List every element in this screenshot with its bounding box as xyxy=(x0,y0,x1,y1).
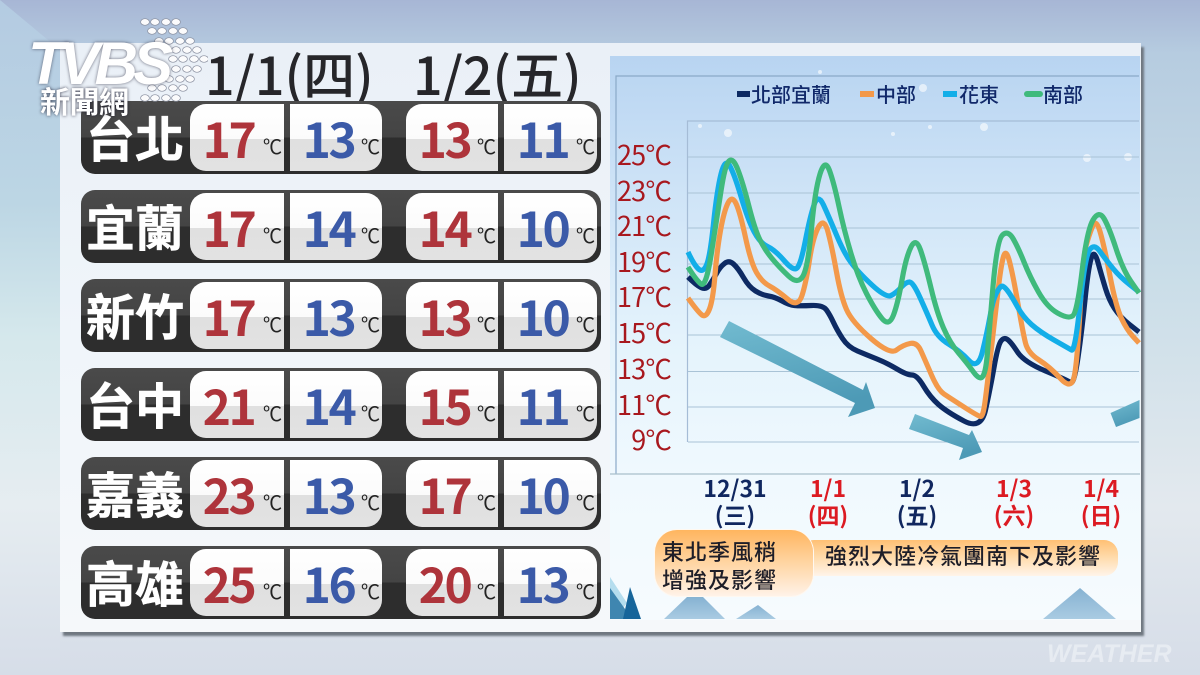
row: Hsinchu: °C xyxy=(263,309,281,338)
y-axis labels: 21°C xyxy=(617,205,671,244)
row: Chiayi: °C xyxy=(361,487,379,516)
row: Kaohsiung: 16 xyxy=(303,547,354,617)
row: Yilan: °C xyxy=(361,220,379,249)
arrow: second cooling trend xyxy=(909,414,982,460)
row: Taichung: °C xyxy=(477,398,495,427)
callout: cold air mass: 強烈大陸冷氣團南下及影響 xyxy=(825,539,1101,571)
row: Taipei xyxy=(81,101,601,174)
y-axis labels: 13°C xyxy=(617,348,671,387)
row: Kaohsiung: °C xyxy=(576,576,594,605)
x-axis date: 1/4 xyxy=(1081,470,1121,531)
row: Kaohsiung: °C xyxy=(361,576,379,605)
y-axis labels: 25°C xyxy=(617,134,671,173)
row: Yilan: °C xyxy=(263,220,281,249)
y-axis labels: 19°C xyxy=(617,241,671,280)
row: Hsinchu: °C xyxy=(477,309,495,338)
callout: northeast monsoon: 東北季風稍 xyxy=(662,535,777,567)
x-axis date: 12/31: 12/31 xyxy=(703,470,767,504)
row: Kaohsiung: 13 xyxy=(517,547,568,617)
row: Kaohsiung: 25 xyxy=(203,547,254,617)
row: Hsinchu: 17 xyxy=(203,280,254,350)
y-axis labels: 9°C xyxy=(631,419,671,458)
row: Taipei: °C xyxy=(361,131,379,160)
legend: south swatch xyxy=(1024,91,1043,97)
row: Kaohsiung: 20 xyxy=(419,547,470,617)
legend: north Yilan label: 北部宜蘭 xyxy=(751,79,831,108)
row: Chiayi xyxy=(81,457,601,530)
x-axis date: 1/2: 1/2 xyxy=(899,470,935,504)
row: Yilan: 17 xyxy=(203,191,254,261)
logo: TVBS news network xyxy=(28,18,208,122)
line: Hualien-Taitung xyxy=(688,163,1139,364)
x-axis date: 1/1: (四) xyxy=(808,497,848,531)
background: left sky strip xyxy=(0,0,42,36)
heading: date 1/2: 1/2(五) xyxy=(413,35,582,110)
row: Chiayi: 嘉義 xyxy=(86,457,184,528)
arrow: third warming trend xyxy=(1110,400,1140,427)
arrow: first cooling trend xyxy=(720,321,875,417)
legend: south label: 南部 xyxy=(1043,79,1083,108)
row: Taipei: 13 xyxy=(303,102,354,172)
row: Hsinchu: 10 xyxy=(517,280,568,350)
row: Taichung: °C xyxy=(576,398,594,427)
x-axis date: 1/4: 1/4 xyxy=(1083,470,1119,504)
row: Hsinchu: 13 xyxy=(303,280,354,350)
line: north Yilan xyxy=(688,254,1139,424)
x-axis date: 12/31 xyxy=(703,470,767,531)
row: Taichung: 11 xyxy=(517,369,568,439)
x-axis date: 1/1 xyxy=(808,470,848,531)
y-axis labels: 17°C xyxy=(617,276,671,315)
row: Kaohsiung: °C xyxy=(477,576,495,605)
row: Taipei: °C xyxy=(263,131,281,160)
y-axis labels: 11°C xyxy=(617,384,671,423)
row: Kaohsiung: °C xyxy=(263,576,281,605)
legend: Hualien swatch xyxy=(943,91,957,97)
icon: logo dots xyxy=(140,18,208,102)
row: Hsinchu: 13 xyxy=(419,280,470,350)
callout: northeast monsoon xyxy=(655,530,813,596)
row: Taichung: 台中 xyxy=(86,368,184,439)
legend: central swatch xyxy=(860,91,874,97)
row: Yilan: °C xyxy=(576,220,594,249)
row: Yilan: 14 xyxy=(303,191,354,261)
row: Kaohsiung xyxy=(81,546,601,619)
row: Chiayi: °C xyxy=(477,487,495,516)
series lines xyxy=(688,160,1139,424)
row: Yilan: 10 xyxy=(517,191,568,261)
legend xyxy=(737,79,1083,108)
logo wordmark: TVBS xyxy=(28,30,168,97)
row: Yilan xyxy=(81,190,601,263)
y-axis labels xyxy=(617,134,671,458)
row: Chiayi: 23 xyxy=(203,458,254,528)
x-axis date: 1/2 xyxy=(897,470,937,531)
row: Taichung: 21 xyxy=(203,369,254,439)
scenery: mountains and trees xyxy=(610,577,1116,619)
legend: central label: 中部 xyxy=(876,79,916,108)
row: Taipei: °C xyxy=(477,131,495,160)
x-axis date: 1/1: 1/1 xyxy=(810,470,846,504)
logo subtitle: 新聞網 xyxy=(40,78,128,122)
row: Taipei: 11 xyxy=(517,102,568,172)
legend: north Yilan swatch xyxy=(737,91,750,97)
row: Hsinchu xyxy=(81,279,601,352)
callout: northeast monsoon: 增強及影響 xyxy=(662,563,777,595)
row: Chiayi: °C xyxy=(576,487,594,516)
row: Chiayi: 17 xyxy=(419,458,470,528)
line: central xyxy=(688,199,1139,417)
row: Hsinchu: °C xyxy=(361,309,379,338)
row: Taipei: 台北 xyxy=(86,101,184,172)
row: Taichung: °C xyxy=(361,398,379,427)
x-axis date: 1/3: (六) xyxy=(994,497,1034,531)
x-axis date: 1/3 xyxy=(994,470,1034,531)
row: Taichung xyxy=(81,368,601,441)
x-axis date: 1/2: (五) xyxy=(897,497,937,531)
row: Taipei: 17 xyxy=(203,102,254,172)
row: Hsinchu: 新竹 xyxy=(86,279,184,350)
line: south xyxy=(688,160,1139,378)
heading: date 1/1: 1/1(四) xyxy=(205,35,374,110)
y-axis labels: 15°C xyxy=(617,312,671,351)
row: Taichung: °C xyxy=(263,398,281,427)
row: Hsinchu: °C xyxy=(576,309,594,338)
row: Taipei: 13 xyxy=(419,102,470,172)
main white panel xyxy=(60,43,1141,632)
y-axis labels: 23°C xyxy=(617,170,671,209)
row: Chiayi: °C xyxy=(263,487,281,516)
row: Chiayi: 10 xyxy=(517,458,568,528)
row: Yilan: 宜蘭 xyxy=(86,190,184,261)
row: Kaohsiung: 高雄 xyxy=(86,546,184,617)
row: Taichung: 14 xyxy=(303,369,354,439)
x-axis date: 12/31: (三) xyxy=(715,497,755,531)
row: Taichung: 15 xyxy=(419,369,470,439)
row: Yilan: 14 xyxy=(419,191,470,261)
row: Chiayi: 13 xyxy=(303,458,354,528)
x-axis date: 1/4: (日) xyxy=(1081,497,1121,531)
legend: Hualien label: 花東 xyxy=(959,79,999,108)
row: Taipei: °C xyxy=(576,131,594,160)
panel: chart background xyxy=(610,56,1140,620)
row: Yilan: °C xyxy=(477,220,495,249)
watermark: WEATHER: WEATHER xyxy=(1047,640,1172,668)
x-axis date: 1/3: 1/3 xyxy=(996,470,1032,504)
